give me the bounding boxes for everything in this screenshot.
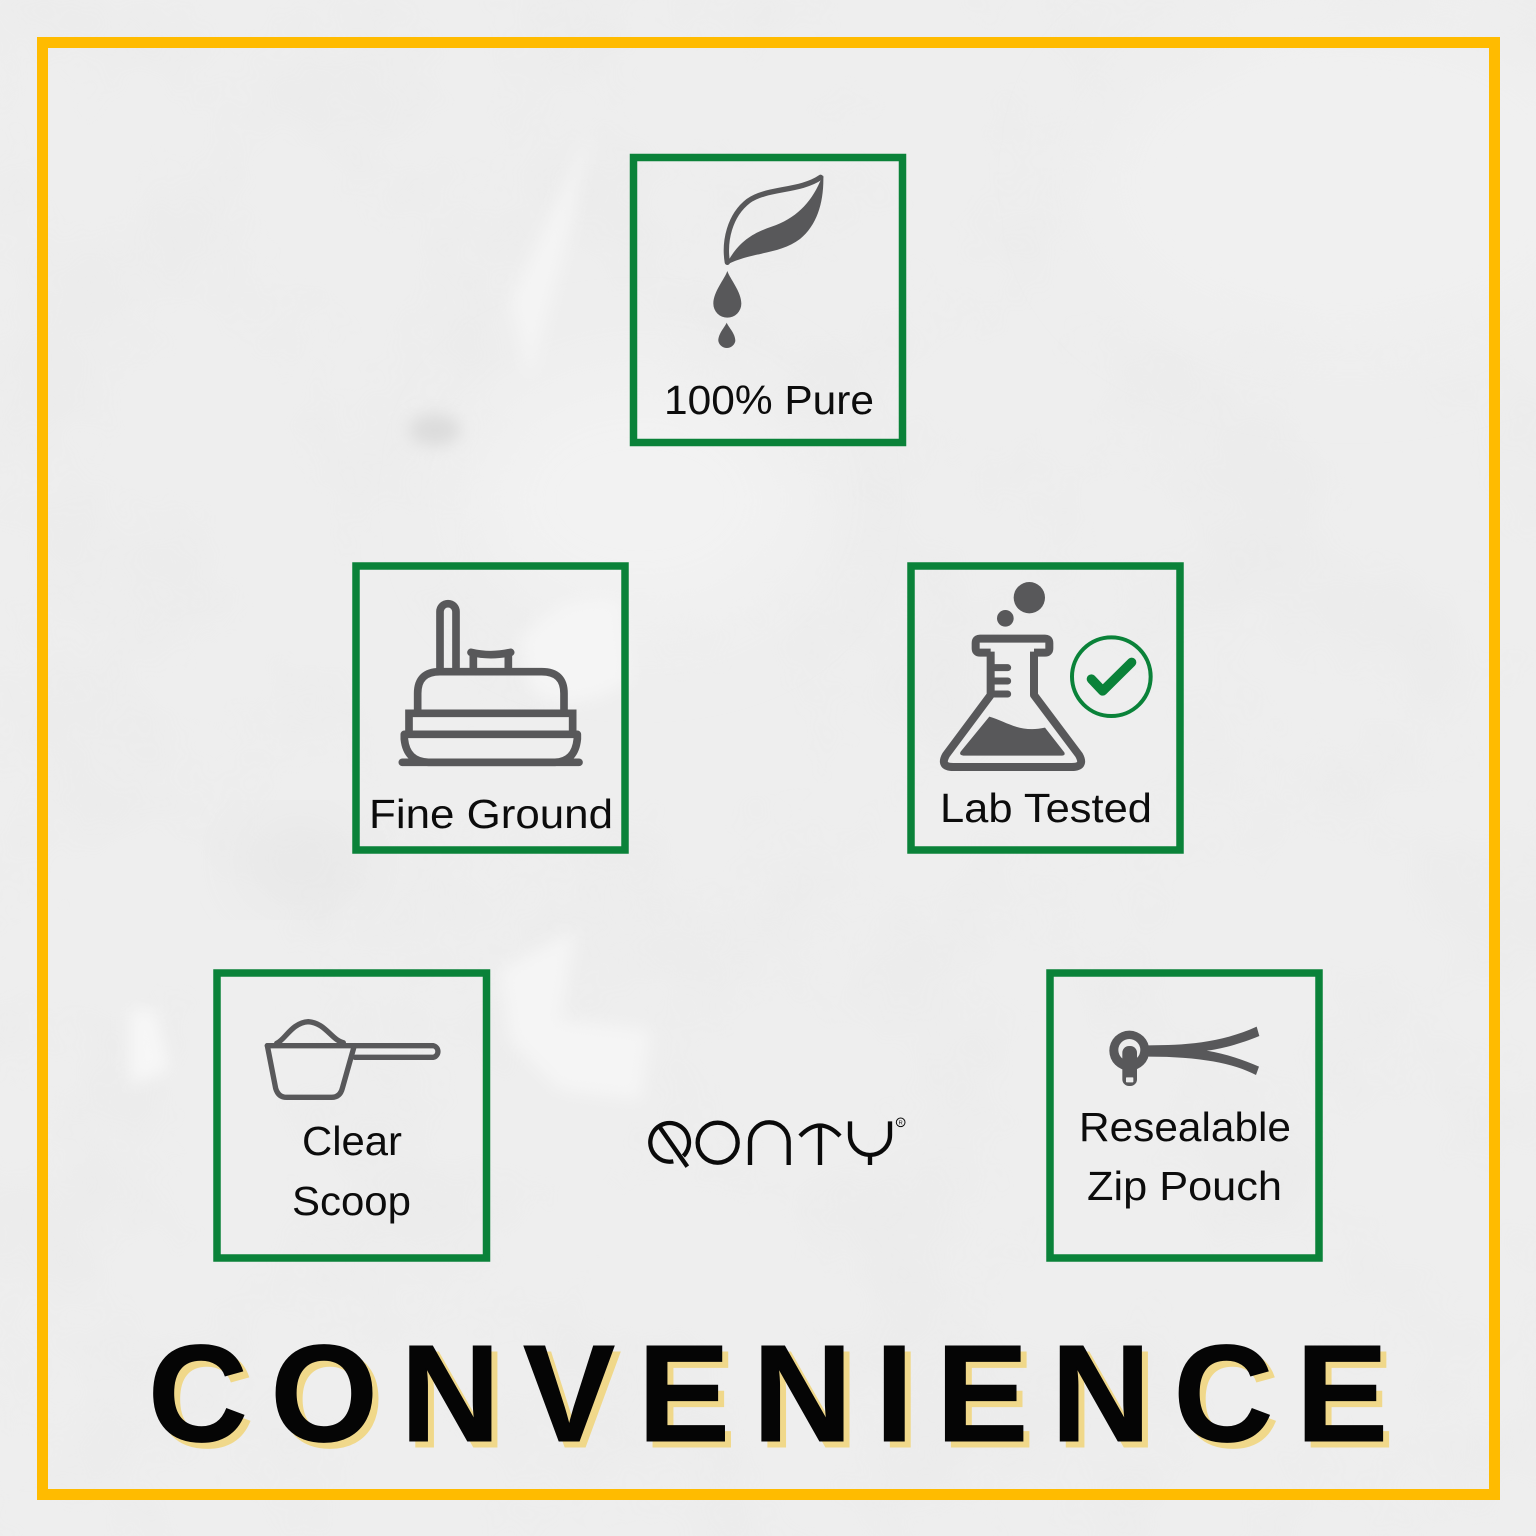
panel: Fine Ground (356, 566, 625, 850)
panel: Clear Scoop (217, 973, 486, 1258)
label: Clear Scoop (292, 1118, 411, 1224)
icon: grinder (402, 604, 579, 762)
icon: scoop (267, 1022, 438, 1097)
label: Fine Ground: Fine Ground (369, 791, 613, 837)
label: 100% Pure: 100% Pure (664, 377, 874, 423)
icon: green check badge (1072, 637, 1151, 716)
label: Resealable Zip Pouch: Zip Pouch (1087, 1163, 1282, 1209)
icon: flask with bubbles (944, 582, 1081, 767)
panel: Resealable Zip Pouch (1050, 973, 1319, 1258)
title: CONVENIENCE: CONVENIENCE (148, 1317, 1388, 1471)
icon: zipper (1109, 1027, 1259, 1086)
label: Clear Scoop: Scoop (292, 1178, 411, 1224)
title: CONVENIENCE: CONVENIENCE (154, 1323, 1394, 1477)
panel: 100% Pure (634, 158, 902, 442)
label: Clear Scoop: Clear (302, 1118, 402, 1164)
logo: QONTY (650, 1118, 905, 1167)
label: Resealable Zip Pouch (1079, 1104, 1291, 1209)
panel: Lab Tested (911, 566, 1180, 850)
label: Resealable Zip Pouch: Resealable (1079, 1104, 1291, 1150)
icon: leaf with drops (713, 176, 823, 348)
logo: QONTY: R (899, 1121, 903, 1127)
label: Lab Tested: Lab Tested (940, 785, 1152, 831)
